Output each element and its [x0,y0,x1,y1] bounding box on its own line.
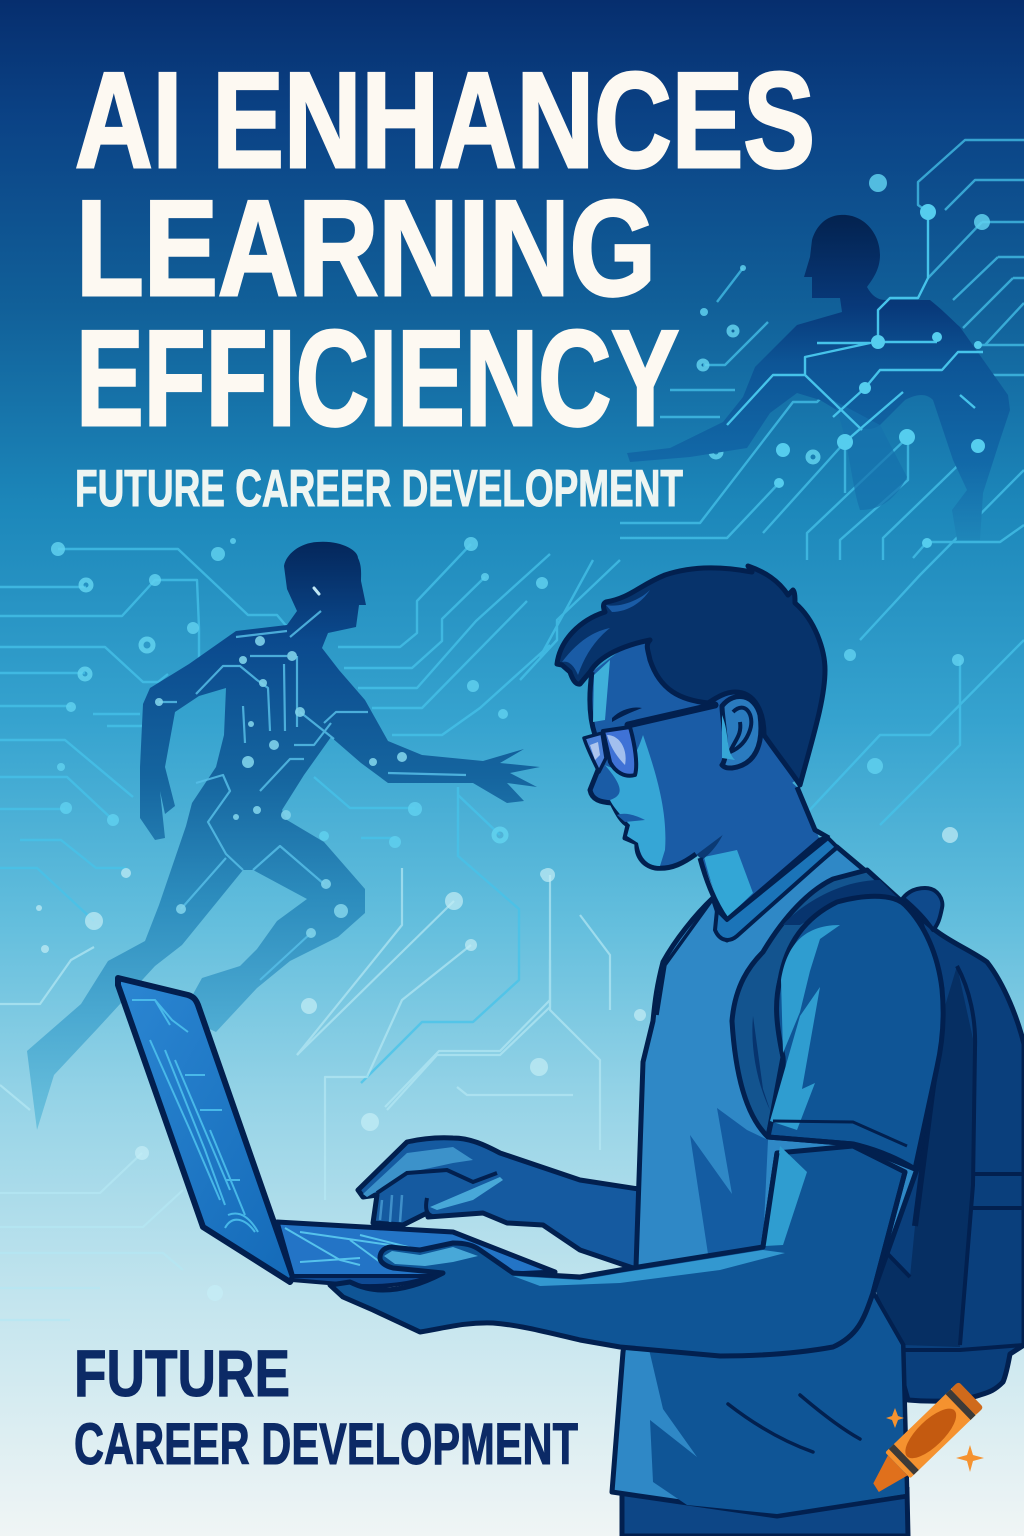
circuit nodes [51,174,990,848]
circuit ring nodes [80,327,818,841]
circuit lines: upper area [0,140,1024,1083]
circuit lines: lower area [0,868,610,1320]
main character: sleeve [768,896,943,1169]
pale circuit nodes [36,827,958,1301]
main character: backpack [850,888,1024,1401]
background figure: upper right silhouette [627,204,1010,548]
icon: crayon with sparkles [862,1382,984,1501]
laptop: keyboard base [277,1222,555,1286]
main character: ear [722,696,761,768]
main character: backpack strap [732,870,900,1137]
main character: forearm and holding hand [330,1146,905,1356]
footer heading: CAREER DEVELOPMENT [74,1412,578,1477]
main character: neck and collar [660,720,837,940]
main character: t-shirt [612,847,942,1516]
title: EFFICIENCY [76,302,679,454]
main character: face [590,620,796,868]
main character: hair [557,566,825,785]
main character: glasses [584,705,715,776]
subtitle: FUTURE CAREER DEVELOPMENT [75,460,683,518]
footer heading: FUTURE [74,1336,290,1410]
footer heading [74,1336,578,1477]
main character: pants [622,1490,908,1536]
title [75,44,815,454]
background figure: running silhouette [27,542,540,1130]
title: LEARNING [76,172,656,324]
laptop: screen [118,978,293,1282]
title: AI ENHANCES [75,44,815,196]
upper arm and typing hand [358,1138,645,1272]
